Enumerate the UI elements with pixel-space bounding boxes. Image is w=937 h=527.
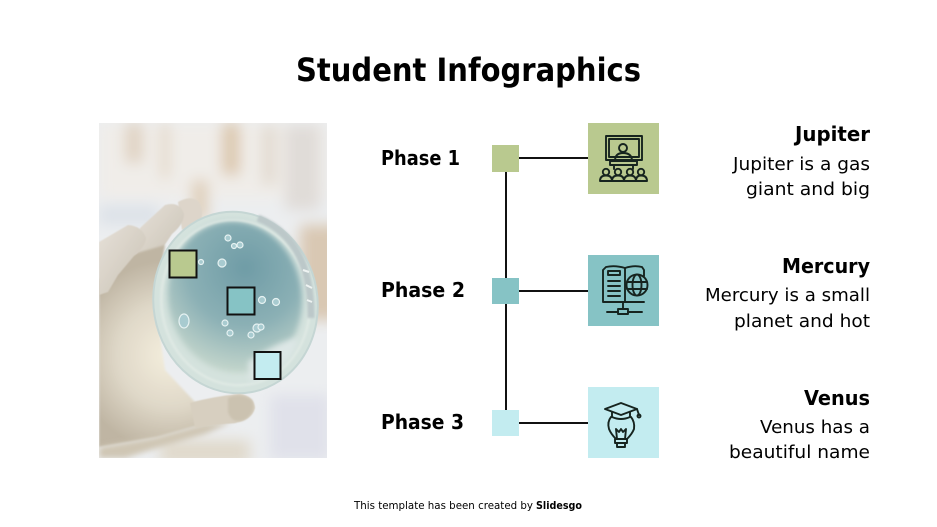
Venus text: Venus has a (760, 417, 870, 438)
photo marker: green (170, 250, 196, 278)
phase 1 label: Phase 1 (381, 146, 460, 170)
icon tile: online book (588, 255, 659, 326)
Venus text: Venus (804, 386, 870, 410)
Jupiter text: giant and big (746, 179, 870, 200)
back fingertip (178, 198, 202, 230)
palm and wrist (99, 245, 196, 448)
title: Student Infographics (296, 51, 641, 89)
icon tile: graduate bulb (588, 387, 659, 458)
dish (152, 210, 319, 394)
Mercury text (705, 254, 870, 332)
Venus text: beautiful name (729, 442, 870, 463)
phase 2 node (492, 278, 519, 304)
phase 2 label: Phase 2 (381, 278, 465, 302)
Jupiter text: Jupiter is a gas (732, 154, 870, 175)
footer credit: Slidesgo (536, 499, 582, 512)
index finger (99, 224, 140, 295)
Jupiter text (732, 122, 870, 200)
Mercury text: planet and hot (734, 311, 870, 332)
Jupiter text: Jupiter (793, 122, 870, 146)
phase 3 label: Phase 3 (381, 410, 464, 434)
photo: gloved hand holding petri dish (99, 123, 340, 464)
thumb (194, 394, 256, 424)
connector lines (506, 158, 589, 423)
Mercury text: Mercury is a small (705, 285, 870, 306)
phase 1 node (492, 145, 519, 172)
Venus text (729, 386, 870, 463)
Mercury text: Mercury (782, 254, 870, 278)
photo marker: light blue (254, 352, 280, 379)
icon tile: classroom (588, 123, 659, 194)
photo marker: teal (228, 288, 254, 314)
phase 3 node (492, 410, 519, 436)
footer credit: This template has been created by (353, 499, 533, 512)
middle finger (138, 204, 182, 254)
